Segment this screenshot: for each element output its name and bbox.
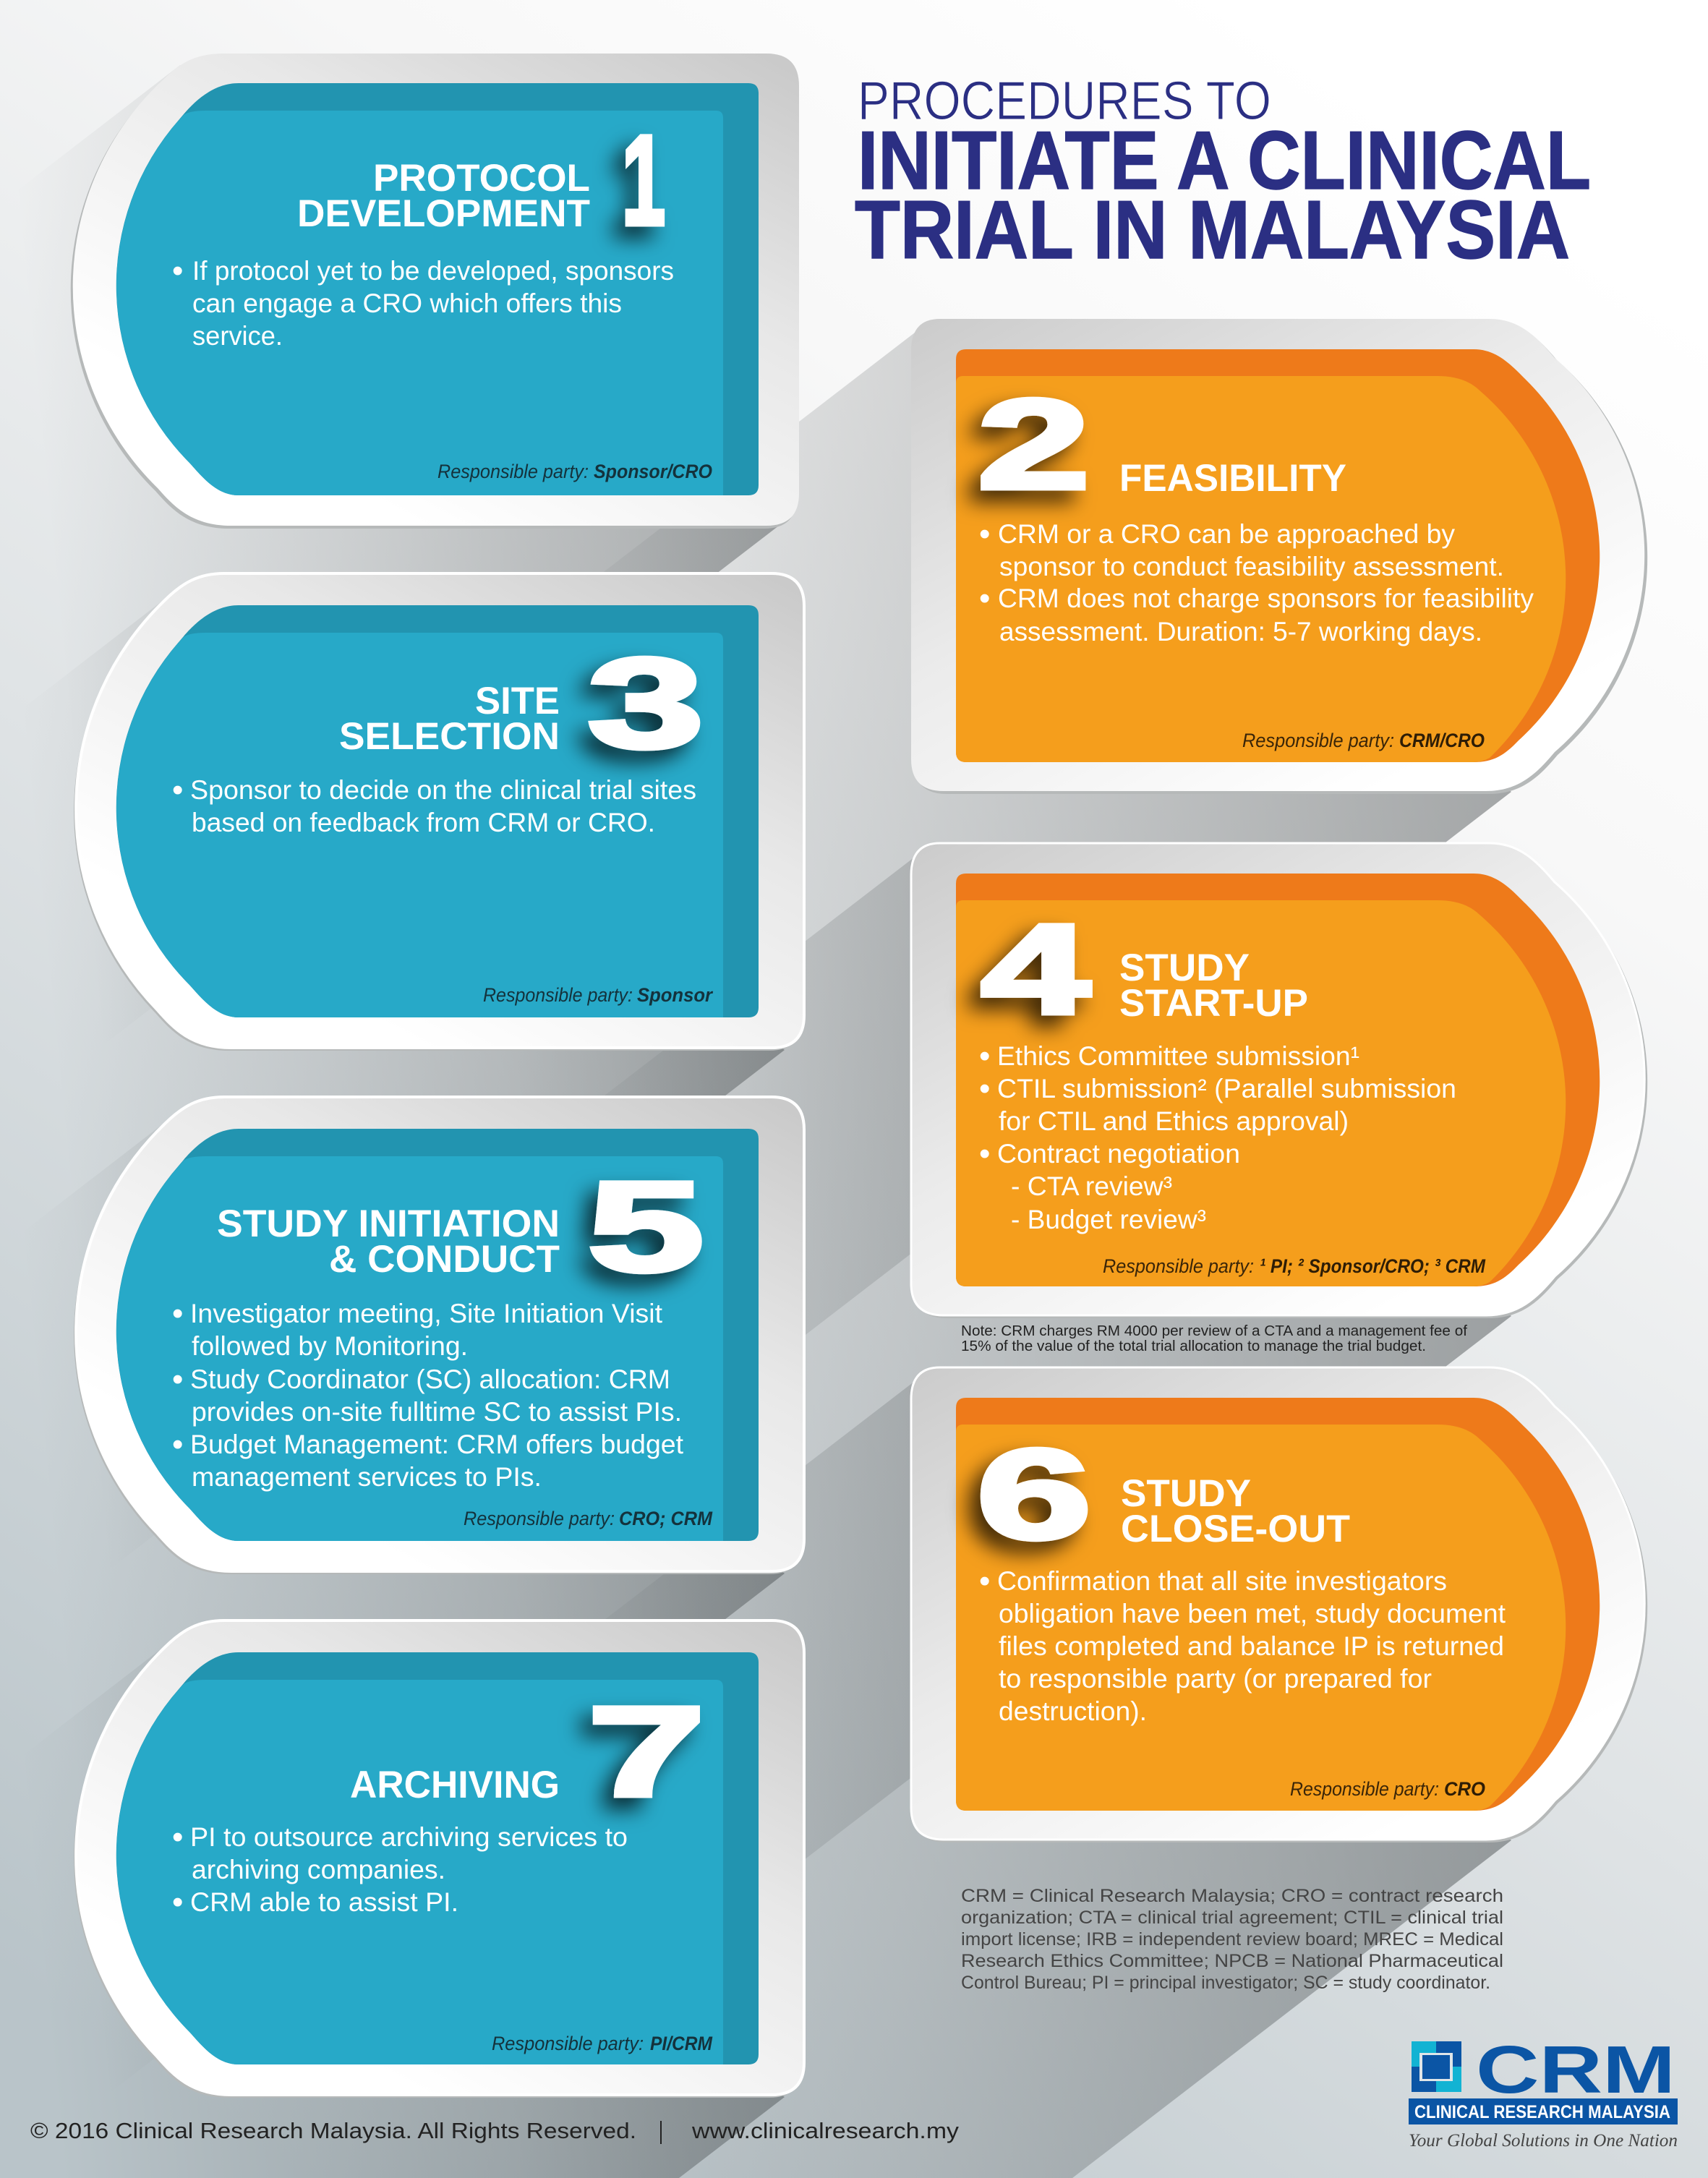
heading <box>1121 1472 1350 1550</box>
body text: • <box>172 1427 183 1462</box>
responsible party: CRO; CRM <box>619 1508 712 1529</box>
card frame <box>74 573 804 1051</box>
number 6: 6 <box>977 1424 1091 1566</box>
panel: step 3 site selection <box>74 573 804 1051</box>
body text: CTIL submission² (Parallel submission <box>997 1074 1456 1103</box>
body text: • <box>172 253 183 289</box>
footer copyright: www.clinicalresearch.my <box>691 2118 960 2143</box>
body text: archiving companies. <box>192 1855 445 1884</box>
logo: Clinical Research Malaysia <box>1409 2032 1678 2151</box>
heading: ARCHIVING <box>350 1764 560 1806</box>
tagline: Your Global Solutions in One Nation <box>1409 2131 1678 2151</box>
number 5: 5 <box>588 1156 704 1298</box>
title: TRIAL IN MALAYSIA <box>855 184 1570 276</box>
number 3: 3 <box>588 633 704 774</box>
card frame <box>911 319 1647 794</box>
heading: STUDY <box>1121 1472 1251 1515</box>
panel: step 6 study close-out <box>911 1367 1647 1842</box>
responsible party <box>1103 1255 1485 1277</box>
heading: & CONDUCT <box>329 1238 560 1281</box>
abbreviations legend: CRM = Clinical Research Malaysia; CRO = contract research <box>961 1886 1503 1906</box>
heading: START-UP <box>1119 982 1308 1025</box>
note on CRM charges: 15% of the value of the total trial allocation to manage the trial budget. <box>961 1338 1426 1354</box>
body text: CRM able to assist PI. <box>190 1887 458 1917</box>
card frame <box>911 1367 1647 1842</box>
body text: CRM or a CRO can be approached by <box>998 519 1456 549</box>
body text: destruction). <box>999 1696 1147 1726</box>
title: INITIATE A CLINICAL <box>858 115 1591 207</box>
abbreviations legend: Control Bureau; PI = principal investigator; SC = study coordinator. <box>961 1973 1490 1993</box>
number 1: 1 <box>622 110 665 252</box>
responsible party: CRO <box>1444 1778 1485 1800</box>
body text: Ethics Committee submission¹ <box>997 1041 1359 1071</box>
heading <box>1119 947 1308 1025</box>
body text: Contract negotiation <box>997 1139 1240 1169</box>
body text: to responsible party (or prepared for <box>999 1664 1432 1694</box>
panel: step 2 feasibility <box>911 319 1647 794</box>
body text: • <box>979 1563 990 1599</box>
panel: step 4 study start-up <box>911 843 1647 1318</box>
body text <box>172 1819 628 1920</box>
body text: Confirmation that all site investigators <box>997 1566 1447 1596</box>
abbreviations legend: Research Ethics Committee; NPCB = National Pharmaceutical <box>961 1951 1503 1971</box>
responsible party: Responsible party: <box>492 2033 644 2054</box>
responsible party: Responsible party: <box>464 1508 615 1529</box>
heading: PROTOCOL <box>373 157 590 200</box>
body text: PI to outsource archiving services to <box>190 1822 628 1852</box>
responsible party: Sponsor/CRO <box>594 461 712 482</box>
footer copyright <box>30 2118 960 2144</box>
number 7: 7 <box>588 1681 705 1823</box>
body text: files completed and balance IP is returned <box>999 1631 1504 1661</box>
body text: • <box>979 516 990 552</box>
heading: SELECTION <box>339 715 560 758</box>
body text: - Budget review³ <box>1011 1205 1206 1234</box>
body text: • <box>172 1362 183 1397</box>
card frame <box>71 54 799 529</box>
body text: obligation have been met, study document <box>999 1599 1506 1628</box>
note on CRM charges <box>961 1323 1467 1354</box>
number 4: 4 <box>981 899 1090 1041</box>
abbreviations legend: organization; CTA = clinical trial agreement; CTIL = clinical trial <box>961 1908 1503 1928</box>
responsible party: Responsible party: <box>437 461 589 482</box>
responsible party: Responsible party: <box>1242 730 1394 751</box>
body text: can engage a CRO which offers this <box>192 289 622 318</box>
body text: provides on-site fulltime SC to assist PIs. <box>192 1397 682 1427</box>
responsible party: CRM/CRO <box>1399 730 1485 751</box>
icon: logo mark <box>1412 2041 1461 2092</box>
body text: • <box>979 1136 990 1171</box>
heading <box>297 157 590 235</box>
body text <box>979 516 1534 646</box>
responsible party: Sponsor <box>637 984 713 1006</box>
heading: FEASIBILITY <box>1119 457 1346 500</box>
body text: If protocol yet to be developed, sponsors <box>192 256 674 286</box>
wordmark: CRM <box>1476 2032 1675 2107</box>
body text <box>979 1038 1456 1234</box>
body text: • <box>172 1884 183 1920</box>
heading: SITE <box>475 680 560 722</box>
panel: step 7 archiving <box>74 1620 804 2098</box>
heading: STUDY INITIATION <box>217 1203 560 1245</box>
responsible party <box>437 461 712 482</box>
body text: • <box>979 1071 990 1106</box>
body text: Sponsor to decide on the clinical trial sites <box>190 775 696 805</box>
responsible party: PI/CRM <box>650 2033 712 2054</box>
body text: for CTIL and Ethics approval) <box>999 1106 1349 1136</box>
body text <box>172 772 696 837</box>
body text: Study Coordinator (SC) allocation: CRM <box>190 1365 670 1394</box>
body text <box>172 1296 684 1492</box>
heading: DEVELOPMENT <box>297 192 590 235</box>
body text: sponsor to conduct feasibility assessment. <box>999 552 1504 581</box>
abbreviations legend: import license; IRB = independent review board; MREC = Medical <box>961 1929 1503 1949</box>
name bar: CLINICAL RESEARCH MALAYSIA <box>1414 2102 1670 2122</box>
heading <box>339 680 560 758</box>
body text: • <box>172 1296 183 1331</box>
responsible party: Responsible party: <box>1290 1778 1439 1800</box>
body text: CRM does not charge sponsors for feasibility <box>998 584 1534 613</box>
body text: based on feedback from CRM or CRO. <box>192 808 655 837</box>
panel: step 1 protocol development <box>71 54 799 529</box>
responsible party: ¹ PI; ² Sponsor/CRO; ³ CRM <box>1260 1255 1485 1277</box>
body text: • <box>172 772 183 808</box>
body text: service. <box>192 321 283 351</box>
heading <box>217 1203 560 1281</box>
body text: • <box>979 1038 990 1074</box>
card frame <box>911 843 1647 1318</box>
body text: • <box>172 1819 183 1855</box>
heading: STUDY <box>1119 947 1250 989</box>
responsible party: Responsible party: <box>483 984 633 1006</box>
body text: Investigator meeting, Site Initiation Visit <box>190 1299 663 1328</box>
body text: assessment. Duration: 5-7 working days. <box>999 617 1482 646</box>
body text <box>172 253 674 351</box>
responsible party <box>464 1508 712 1529</box>
abbreviations legend <box>961 1886 1503 1993</box>
card frame <box>74 1097 804 1574</box>
body text: • <box>979 581 990 616</box>
title <box>855 70 1591 276</box>
body text: - CTA review³ <box>1011 1171 1172 1201</box>
heading: CLOSE-OUT <box>1121 1508 1350 1550</box>
body text: management services to PIs. <box>192 1462 542 1492</box>
responsible party: Responsible party: <box>1103 1255 1254 1277</box>
responsible party <box>1242 730 1485 751</box>
panel: step 5 study initiation and conduct <box>74 1097 804 1574</box>
body text: Budget Management: CRM offers budget <box>190 1430 684 1459</box>
note on CRM charges: Note: CRM charges RM 4000 per review of a CTA and a management fee of <box>961 1323 1467 1339</box>
card frame <box>74 1620 804 2098</box>
title: PROCEDURES TO <box>858 70 1271 131</box>
footer copyright: © 2016 Clinical Research Malaysia. All Rights Reserved. <box>30 2118 636 2143</box>
number 2: 2 <box>978 374 1090 516</box>
body text: followed by Monitoring. <box>192 1331 468 1361</box>
body text <box>979 1563 1506 1726</box>
